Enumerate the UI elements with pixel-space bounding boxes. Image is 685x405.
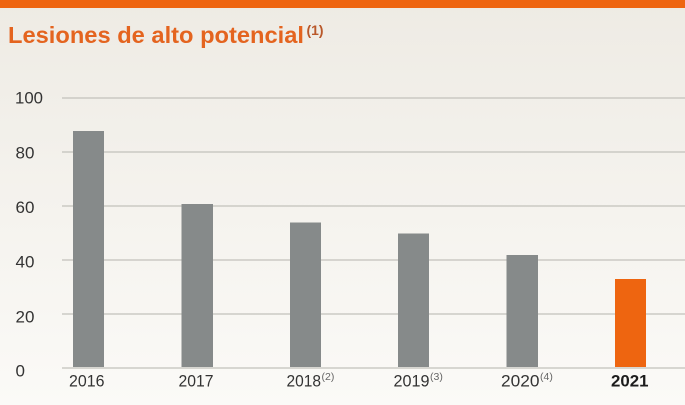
x axis labels: 2020 bbox=[501, 372, 540, 390]
y axis labels: 100 bbox=[15, 88, 43, 108]
x axis labels: (2) bbox=[322, 371, 334, 383]
y axis labels: 40 bbox=[16, 252, 34, 272]
y axis labels bbox=[15, 88, 43, 380]
top orange band bbox=[0, 0, 685, 8]
x axis labels: 2021 bbox=[611, 372, 648, 390]
bars bbox=[73, 131, 538, 367]
y axis labels: 0 bbox=[16, 362, 25, 380]
x axis labels: 2019 bbox=[394, 372, 430, 390]
highlighted bar 2021 bbox=[615, 279, 646, 367]
x axis labels: 2016 bbox=[69, 372, 104, 390]
title: Lesiones de alto potencial bbox=[8, 22, 304, 48]
y axis labels: 60 bbox=[16, 198, 34, 217]
x axis labels bbox=[69, 371, 648, 390]
y axis labels: 80 bbox=[16, 144, 34, 162]
x axis labels: (3) bbox=[430, 371, 443, 383]
x axis labels: (4) bbox=[540, 371, 553, 383]
x axis labels: 2017 bbox=[178, 372, 214, 390]
bar chart bbox=[15, 88, 685, 390]
y axis labels: 20 bbox=[16, 308, 34, 326]
x axis labels: 2018 bbox=[286, 372, 321, 390]
title: (1) bbox=[306, 22, 324, 38]
